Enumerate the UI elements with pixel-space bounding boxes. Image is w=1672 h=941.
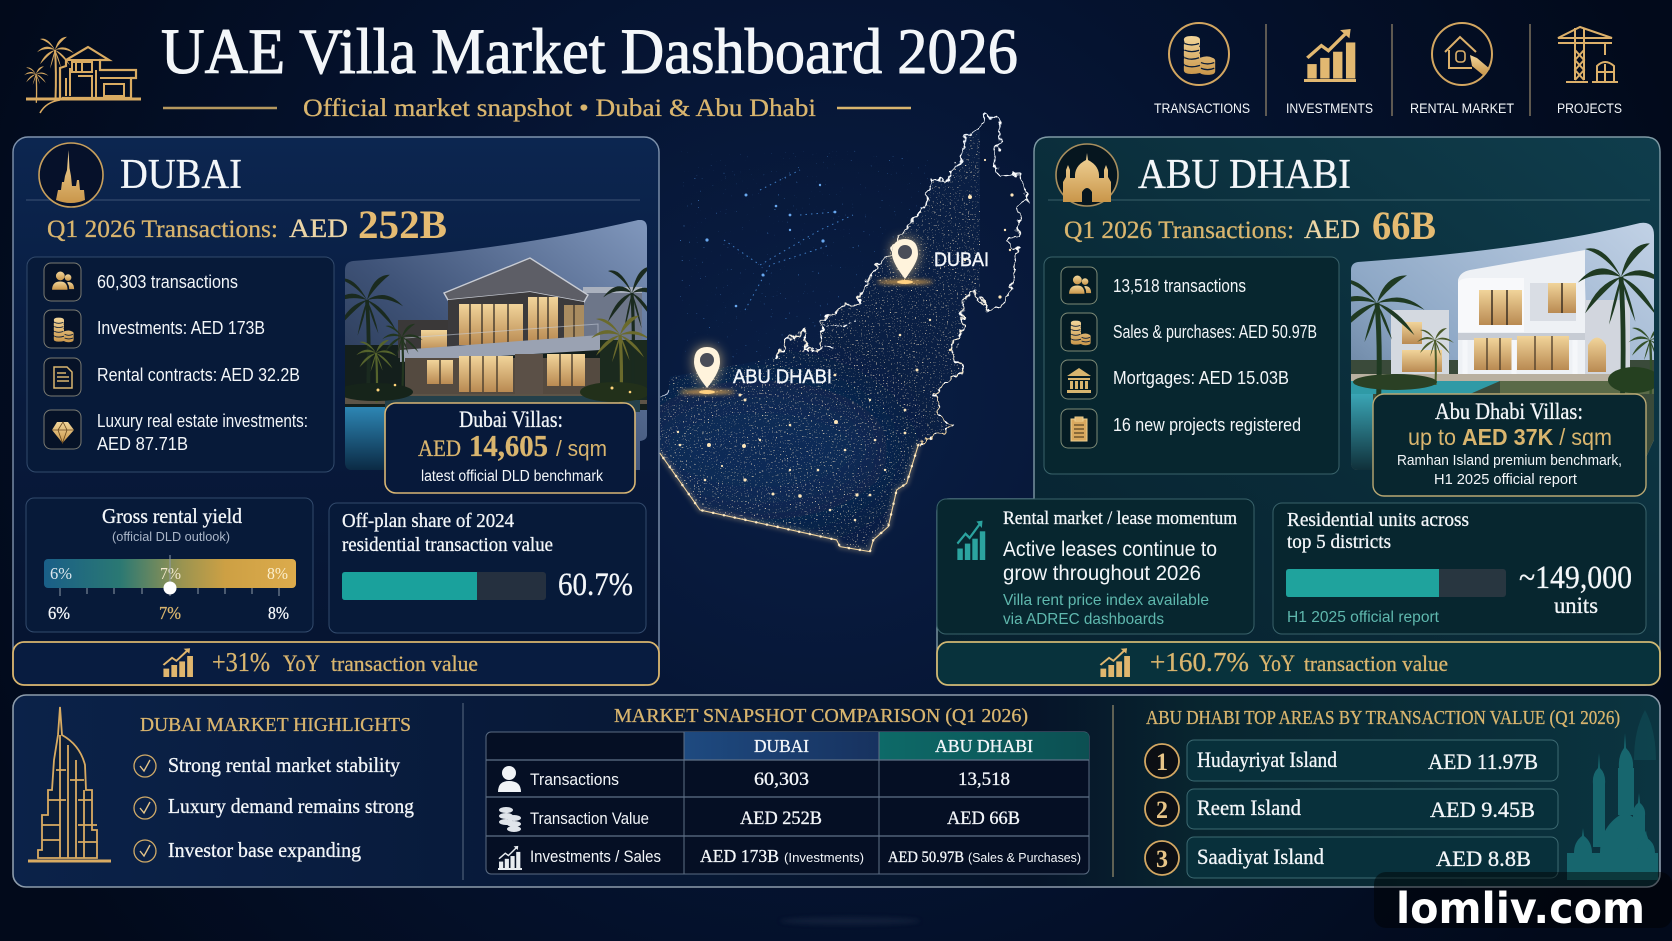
card: residential units	[1273, 503, 1646, 634]
card: rental market momentum: Villa rent price index available	[1003, 592, 1209, 609]
pin: Abu Dhabi	[679, 347, 832, 394]
top areas list	[1145, 707, 1658, 880]
price callout: Dubai villas: 14,605	[469, 428, 548, 463]
icon: transactions coins	[1154, 23, 1250, 116]
stat: mortgages: Mortgages: AED 15.03B	[1113, 368, 1289, 388]
price callout: Dubai villas: / sqm	[556, 436, 607, 461]
rank: Reem Island: AED 9.45B	[1430, 797, 1535, 822]
stat: investments: Investments: AED 173B	[97, 318, 265, 338]
price callout: Abu Dhabi villas: up to AED 37K / sqm	[1408, 424, 1612, 450]
price callout: Abu Dhabi villas: Abu Dhabi Villas:	[1435, 399, 1583, 424]
row: transactions: 60,303	[754, 769, 809, 790]
title: UAE Villa Market Dashboard 2026	[161, 16, 1018, 88]
price callout: Abu Dhabi villas	[1373, 394, 1646, 496]
stat: transactions: 60,303 transactions	[97, 272, 238, 292]
category icons	[1154, 23, 1622, 116]
stat: new projects	[1061, 409, 1301, 448]
villa photo: Dubai	[333, 220, 662, 470]
subtitle with rules: Official market snapshot • Dubai & Abu Dhabi	[303, 95, 816, 122]
progress: off-plan share	[329, 503, 646, 633]
card: rental market momentum	[937, 499, 1254, 634]
icon: mosque badge	[1056, 144, 1118, 206]
growth bar: Dubai: transaction value	[331, 651, 478, 676]
stat: luxury investments: AED 87.71B	[97, 434, 188, 454]
row: investments and sales: (Sales & Purchases)	[968, 850, 1081, 865]
gulf network lights	[680, 150, 940, 360]
growth bar: Abu Dhabi: transaction value	[1304, 651, 1448, 676]
icon: investments chart: INVESTMENTS	[1286, 101, 1373, 116]
price callout: Dubai villas	[385, 403, 635, 493]
progress: off-plan share: Off-plan share of 2024	[342, 510, 514, 532]
row: transactions: 13,518	[958, 769, 1010, 790]
icon: rental market house tag	[1410, 23, 1514, 116]
watermark: lomliv.com	[1396, 884, 1645, 934]
row: transactions	[498, 766, 1010, 792]
logo: gold villa and palms	[24, 37, 141, 113]
row: transaction value	[499, 807, 1020, 832]
headline transactions: Q1 2026 Transactions:	[47, 216, 278, 243]
row: investments and sales: (Investments)	[784, 850, 864, 865]
rank: Hudayriyat Island	[1145, 740, 1558, 781]
icon: projects crane	[1557, 27, 1622, 116]
gauge: gross rental yield: 6%	[50, 564, 72, 583]
card: residential units: ~149,000	[1519, 560, 1632, 596]
icon: rental market house tag: RENTAL MARKET	[1410, 101, 1514, 116]
price callout: Abu Dhabi villas: Ramhan Island premium benchmark,	[1397, 453, 1622, 469]
card: residential units: H1 2025 official report	[1287, 609, 1440, 626]
faint footer smudge	[780, 917, 920, 925]
icon: investments chart	[1286, 29, 1373, 116]
card: rental market momentum: via ADREC dashboards	[1003, 611, 1164, 628]
pin: Abu Dhabi: ABU DHABI	[733, 367, 832, 388]
villa photo: Abu Dhabi	[1351, 222, 1654, 470]
row: investments and sales	[498, 846, 1081, 870]
gauge: gross rental yield: 7%	[160, 564, 181, 583]
card: rental market momentum: Rental market / lease momentum	[1003, 508, 1237, 529]
gauge: gross rental yield	[26, 498, 313, 632]
icon: mosque silhouette	[1567, 710, 1658, 880]
stat: rental contracts	[44, 358, 300, 396]
card: residential units: Residential units across	[1287, 509, 1469, 531]
Dubai highlights: DUBAI MARKET HIGHLIGHTS	[140, 714, 411, 736]
heading: Dubai: DUBAI	[120, 152, 242, 198]
icon: transactions coins: TRANSACTIONS	[1154, 101, 1250, 116]
rank: Saadiyat Island: Saadiyat Island	[1197, 844, 1324, 869]
gauge: gross rental yield: 8%	[267, 564, 288, 583]
progress: off-plan share: residential transaction value	[342, 534, 553, 556]
gauge: gross rental yield: 8%	[268, 603, 289, 623]
pin: Dubai	[877, 239, 989, 284]
stat: transactions	[44, 263, 238, 301]
gauge: gross rental yield: Gross rental yield	[102, 504, 242, 528]
stat: luxury investments	[44, 410, 308, 454]
gauge: gross rental yield: 7%	[159, 603, 181, 623]
row: investments and sales: Investments / Sales	[530, 848, 661, 866]
comparison table: DUBAI	[754, 736, 809, 756]
map outline glow	[660, 117, 1028, 552]
icon: Burj Khalifa line art	[28, 707, 111, 861]
headline transactions: AED	[1304, 215, 1360, 244]
gauge: gross rental yield: (official DLD outlook)	[112, 529, 230, 544]
progress: off-plan share: 60.7%	[558, 567, 633, 603]
comparison table	[486, 705, 1089, 874]
stat: sales and purchases: Sales & purchases: AED 50.97B	[1113, 322, 1317, 342]
card: rental market momentum: grow throughout 2026	[1003, 562, 1201, 585]
comparison table: MARKET SNAPSHOT COMPARISON (Q1 2026)	[614, 705, 1028, 727]
growth bar: Dubai	[13, 642, 659, 685]
gauge: gross rental yield: 6%	[48, 603, 70, 623]
icon: Burj Khalifa badge	[39, 143, 103, 207]
headline transactions	[1064, 203, 1436, 248]
row: transaction value: AED 66B	[947, 808, 1020, 829]
rank: Reem Island: 2	[1156, 797, 1168, 824]
growth bar: Abu Dhabi: +160.7%	[1150, 647, 1249, 677]
Dubai highlights	[134, 714, 414, 862]
rank: Saadiyat Island	[1145, 837, 1558, 878]
rank: Hudayriyat Island: AED 11.97B	[1428, 749, 1538, 774]
growth bar: Abu Dhabi	[937, 642, 1660, 685]
stats list	[27, 257, 334, 472]
icon: projects crane: PROJECTS	[1557, 101, 1622, 116]
growth bar: Abu Dhabi: YoY	[1259, 651, 1295, 676]
bright city lights	[677, 159, 1014, 521]
card: residential units: top 5 districts	[1287, 531, 1391, 553]
stats list	[1044, 257, 1339, 474]
map land	[660, 130, 980, 549]
stat: rental contracts: Rental contracts: AED 32.2B	[97, 365, 300, 385]
stat: sales and purchases	[1061, 313, 1317, 351]
stat: investments	[44, 310, 265, 348]
headline transactions: AED	[289, 214, 348, 243]
card: rental market momentum: Active leases continue to	[1003, 538, 1217, 561]
row: investments and sales: AED 50.97B	[888, 849, 964, 866]
panel: bottom strip	[13, 695, 1660, 887]
growth bar: Dubai: +31%	[212, 647, 270, 677]
rank: Saadiyat Island: AED 8.8B	[1436, 846, 1531, 871]
highlight: rental stability: Strong rental market stability	[168, 753, 400, 777]
highlight: luxury demand: Luxury demand remains strong	[168, 794, 414, 818]
stat: transactions: 13,518 transactions	[1113, 276, 1246, 296]
headline transactions: 66B	[1372, 203, 1436, 248]
rank: Hudayriyat Island: 1	[1156, 749, 1168, 776]
price callout: Dubai villas: latest official DLD benchmark	[421, 468, 603, 485]
pin: Dubai: DUBAI	[934, 250, 989, 271]
highlight: investor base: Investor base expanding	[168, 838, 361, 862]
row: transaction value: AED 252B	[740, 808, 822, 829]
stat: mortgages	[1061, 360, 1289, 399]
price callout: Abu Dhabi villas: H1 2025 official report	[1434, 472, 1577, 488]
stat: transactions	[1061, 267, 1246, 304]
rank: Saadiyat Island: 3	[1156, 846, 1168, 873]
headline transactions: 252B	[358, 202, 447, 247]
row: transaction value: Transaction Value	[530, 810, 649, 828]
headline transactions: Q1 2026 Transactions:	[1064, 217, 1294, 244]
panel: Dubai	[13, 137, 662, 685]
row: transactions: Transactions	[530, 771, 619, 789]
rank: Hudayriyat Island: Hudayriyat Island	[1197, 747, 1337, 772]
heading: Abu Dhabi: ABU DHABI	[1138, 152, 1351, 198]
central UAE night map	[660, 112, 1030, 556]
stat: new projects: 16 new projects registered	[1113, 415, 1301, 435]
panel: Abu Dhabi	[937, 137, 1672, 685]
row: investments and sales: AED 173B	[700, 846, 779, 866]
growth bar: Dubai: YoY	[283, 651, 320, 676]
headline transactions	[47, 202, 447, 247]
rank: Reem Island	[1145, 789, 1558, 829]
price callout: Dubai villas: AED	[418, 436, 461, 461]
price callout: Dubai villas: Dubai Villas:	[459, 407, 563, 432]
stat: luxury investments: Luxury real estate investments:	[97, 411, 308, 431]
rank: Reem Island: Reem Island	[1197, 795, 1301, 820]
comparison table: ABU DHABI	[935, 736, 1033, 756]
card: residential units: units	[1554, 593, 1598, 618]
